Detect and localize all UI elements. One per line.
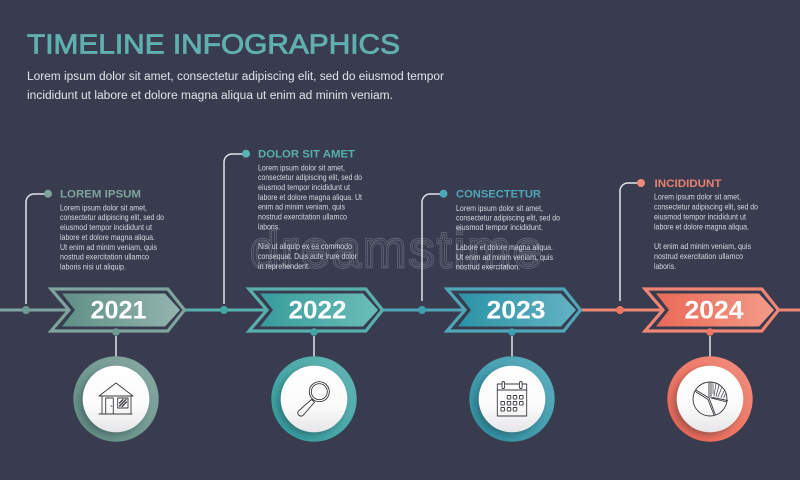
intro text: incididunt ut labore et dolore magna aliqua ut enim ad minim veniam. <box>27 90 393 102</box>
2023 arrow: 2023 <box>486 296 546 324</box>
2021 arrow <box>51 289 184 331</box>
2021 top dot <box>44 190 52 198</box>
step 2021 <box>22 188 184 442</box>
2024 connector <box>620 183 639 301</box>
2023 text <box>456 203 560 272</box>
2024 arrow <box>645 289 778 331</box>
intro text <box>27 71 444 102</box>
icon: house <box>99 383 133 414</box>
2021 arrow: 2021 <box>90 296 147 324</box>
2024 stem <box>706 328 714 358</box>
2024 text: eiusmod tempor incididunt ut <box>654 212 747 222</box>
icon: magnifier <box>298 382 329 416</box>
2022 text: laboris. <box>258 221 280 231</box>
2022 line dot <box>220 306 228 314</box>
2022 text: consequat. Duis aute irure dolor <box>258 251 357 261</box>
title: TIMELINE INFOGRAPHICS <box>27 28 400 60</box>
2023 top dot <box>440 190 448 198</box>
2022 text: Lorem ipsum dolor sit amet, <box>258 162 345 172</box>
2024 heading: INCIDIDUNT <box>654 178 722 190</box>
icon: calendar <box>497 382 527 416</box>
2023 badge <box>469 356 555 442</box>
2021 stem <box>112 328 120 358</box>
2022 top dot <box>242 150 250 158</box>
2024 arrow: 2024 <box>684 296 744 324</box>
2021 text <box>60 202 164 271</box>
intro text: Lorem ipsum dolor sit amet, consectetur adipiscing elit, sed do eiusmod tempor <box>27 71 444 83</box>
timeline line <box>0 308 800 312</box>
2023 text: Ut enim ad minim veniam, quis <box>456 252 553 262</box>
2023 stem <box>508 328 516 358</box>
2024 text: Ut enim ad minim veniam, quis <box>654 241 751 251</box>
2023 text: nostrud exercitation. <box>456 262 520 272</box>
2023 text: consectetur adipiscing elit, sed do <box>456 212 560 222</box>
2024 line dot <box>616 306 624 314</box>
2023 text: Labore et dolore magna aliqua. <box>456 242 553 252</box>
2022 text: labore et dolore magna aliqua. Ut <box>258 192 363 202</box>
2022 text: in reprehendent. <box>258 261 310 271</box>
2022 text: enim ad minim veniam, quis <box>258 202 345 212</box>
step 2024 <box>616 178 778 442</box>
2023 line dot <box>418 306 426 314</box>
2024 badge <box>667 356 753 442</box>
2022 heading: DOLOR SIT AMET <box>258 148 355 160</box>
2021 text: consectetur adipiscing elit, sed do <box>60 212 164 222</box>
watermark: dreamstime <box>250 221 542 279</box>
2022 text <box>258 162 363 271</box>
icon: pie chart <box>693 382 728 416</box>
watermark: dreamstime <box>250 221 542 279</box>
2022 connector <box>224 154 244 304</box>
2024 top dot <box>637 179 645 187</box>
2022 text: nostrud exercitation ullamco <box>258 211 347 221</box>
2021 text: eiusmod tempor incididunt ut <box>60 222 153 232</box>
2022 text: Nisi ut aliquip ex ea commodo <box>258 241 352 251</box>
2024 text: labore et dolore magna aliqua. <box>654 222 749 232</box>
2021 line dot <box>22 306 30 314</box>
2022 text: consectetur adipiscing elit, sed do <box>258 172 362 182</box>
2023 connector <box>422 194 441 301</box>
2024 text: Lorem ipsum dolor sit amet, <box>654 192 741 202</box>
2023 arrow <box>447 289 580 331</box>
2023 heading: CONSECTETUR <box>456 188 541 200</box>
2024 text: nostrud exercitation ullamco <box>654 251 743 261</box>
2021 text: labore et dolore magna aliqua. <box>60 232 155 242</box>
2022 stem <box>310 328 318 358</box>
2021 text: nostrud exercitation ullamco <box>60 252 149 262</box>
2023 text: eiusmod tempor incididunt. <box>456 222 543 232</box>
step 2023 <box>418 188 580 442</box>
2021 connector <box>26 194 46 304</box>
2021 badge <box>73 356 159 442</box>
2022 text: eiusmod tempor incididunt ut <box>258 182 351 192</box>
2021 heading: LOREM IPSUM <box>60 188 141 200</box>
2024 text: consectetur adipiscing elit, sed do <box>654 202 758 212</box>
2021 text: Lorem ipsum dolor sit amet, <box>60 202 147 212</box>
2023 text: Lorem ipsum dolor sit amet, <box>456 203 543 213</box>
2022 arrow <box>249 289 382 331</box>
2021 text: laboris nisi ut aliquip. <box>60 261 126 271</box>
2022 arrow: 2022 <box>288 296 346 324</box>
2024 text <box>654 192 758 271</box>
2021 text: Ut enim ad minim veniam, quis <box>60 242 157 252</box>
step 2022 <box>220 148 382 442</box>
2024 text: laboris. <box>654 261 676 271</box>
2022 badge <box>271 356 357 442</box>
